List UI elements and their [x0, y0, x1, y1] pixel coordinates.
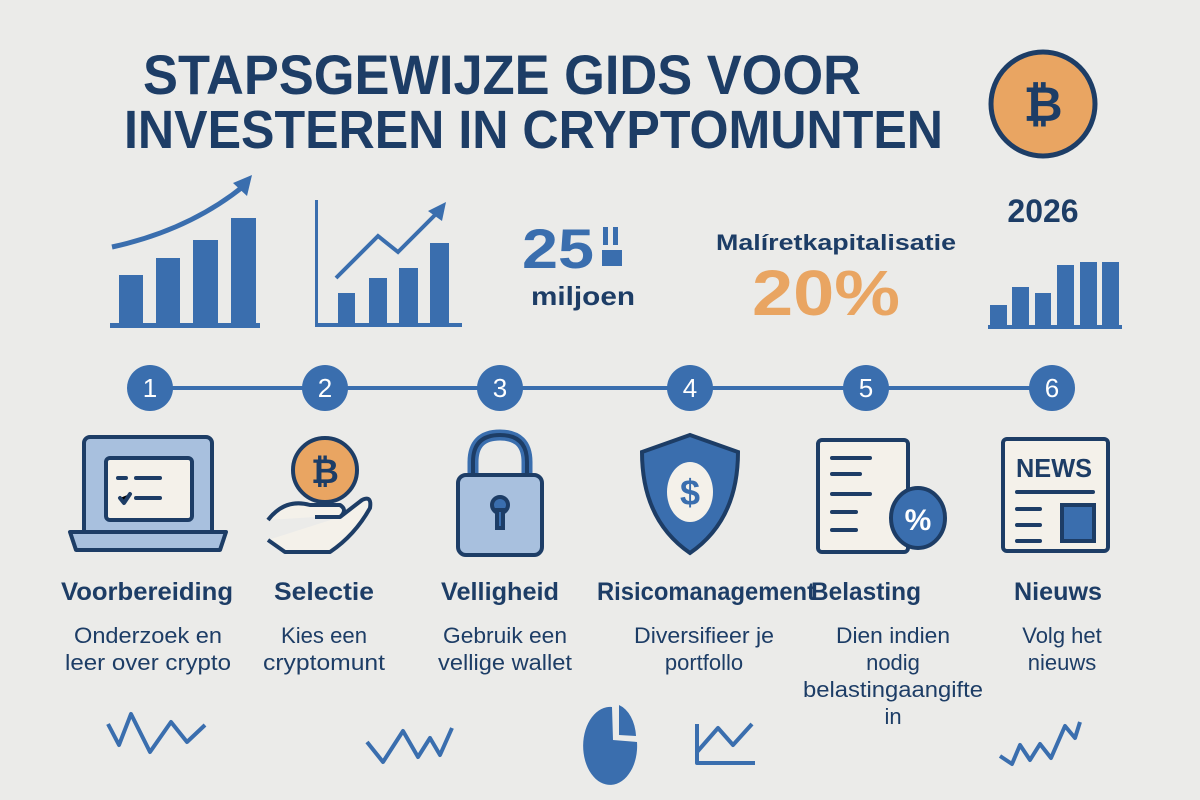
stat: marktkapitalisatie 20%: 20%: [752, 257, 900, 329]
step labels: Selectie: [274, 578, 374, 606]
step labels: cryptomunt: [263, 650, 385, 675]
icon: bitcoin coin: [991, 52, 1095, 156]
step labels: in: [884, 704, 902, 729]
timeline: 3: [493, 373, 507, 403]
step labels: Diversifieer je: [634, 623, 774, 648]
title: INVESTEREN IN CRYPTOMUNTEN: [124, 100, 943, 160]
icon: hand with coin: [268, 438, 370, 552]
icon: tax document: %: [905, 504, 931, 537]
step labels: Velligheid: [441, 578, 559, 606]
timeline: 1: [143, 373, 157, 403]
step labels: Dien indien: [836, 623, 950, 648]
step labels: Gebruik een: [443, 623, 567, 648]
title: [124, 43, 943, 160]
step labels: Volg het: [1022, 623, 1102, 648]
timeline: 4: [683, 373, 697, 403]
stat: marktkapitalisatie 20%: Malíretkapitalisatie: [716, 230, 956, 255]
step labels: belastingaangifte: [803, 677, 983, 702]
stat: 25 miljoen: miljoen: [531, 281, 635, 311]
timeline: 6: [1045, 373, 1059, 403]
timeline: 2: [318, 373, 332, 403]
timeline: [127, 365, 1075, 411]
icon: laptop: [70, 437, 226, 550]
icon: bitcoin coin: ₿: [1023, 79, 1063, 132]
year label: 2026: [1007, 193, 1079, 229]
step labels: nieuws: [1028, 650, 1096, 675]
icon: padlock: [458, 435, 542, 555]
icon: shield with dollar: [642, 435, 738, 553]
step labels: Nieuws: [1014, 578, 1102, 606]
step labels: Belasting: [811, 578, 921, 606]
icon: hand with coin: ₿: [311, 453, 339, 491]
chart: rising bars with arrow: [110, 175, 260, 328]
step labels: nodig: [866, 650, 920, 675]
icon: shield with dollar: $: [680, 472, 700, 513]
chart: small bars right: [988, 262, 1122, 329]
step labels: vellige wallet: [438, 650, 572, 675]
timeline: 5: [859, 373, 873, 403]
chart: bars with zigzag: [315, 200, 462, 327]
step labels: portfollo: [665, 650, 743, 675]
step labels: Kies een: [281, 623, 367, 648]
icon: newspaper: [1003, 439, 1108, 551]
decorative sparklines and pie: [108, 714, 1080, 764]
step labels: Onderzoek en: [74, 623, 222, 648]
step labels: leer over crypto: [65, 650, 231, 675]
stat: 25 miljoen: 25: [522, 217, 594, 280]
stat: marktkapitalisatie 20%: [716, 230, 956, 329]
step labels: [61, 578, 1102, 729]
icon: newspaper: NEWS: [1016, 453, 1092, 483]
icon: tax document: [818, 440, 945, 552]
title: STAPSGEWIJZE GIDS VOOR: [143, 43, 861, 106]
step labels: Voorbereiding: [61, 578, 233, 606]
step labels: Risicomanagement: [597, 578, 816, 606]
stat: 25 miljoen: [522, 217, 635, 311]
